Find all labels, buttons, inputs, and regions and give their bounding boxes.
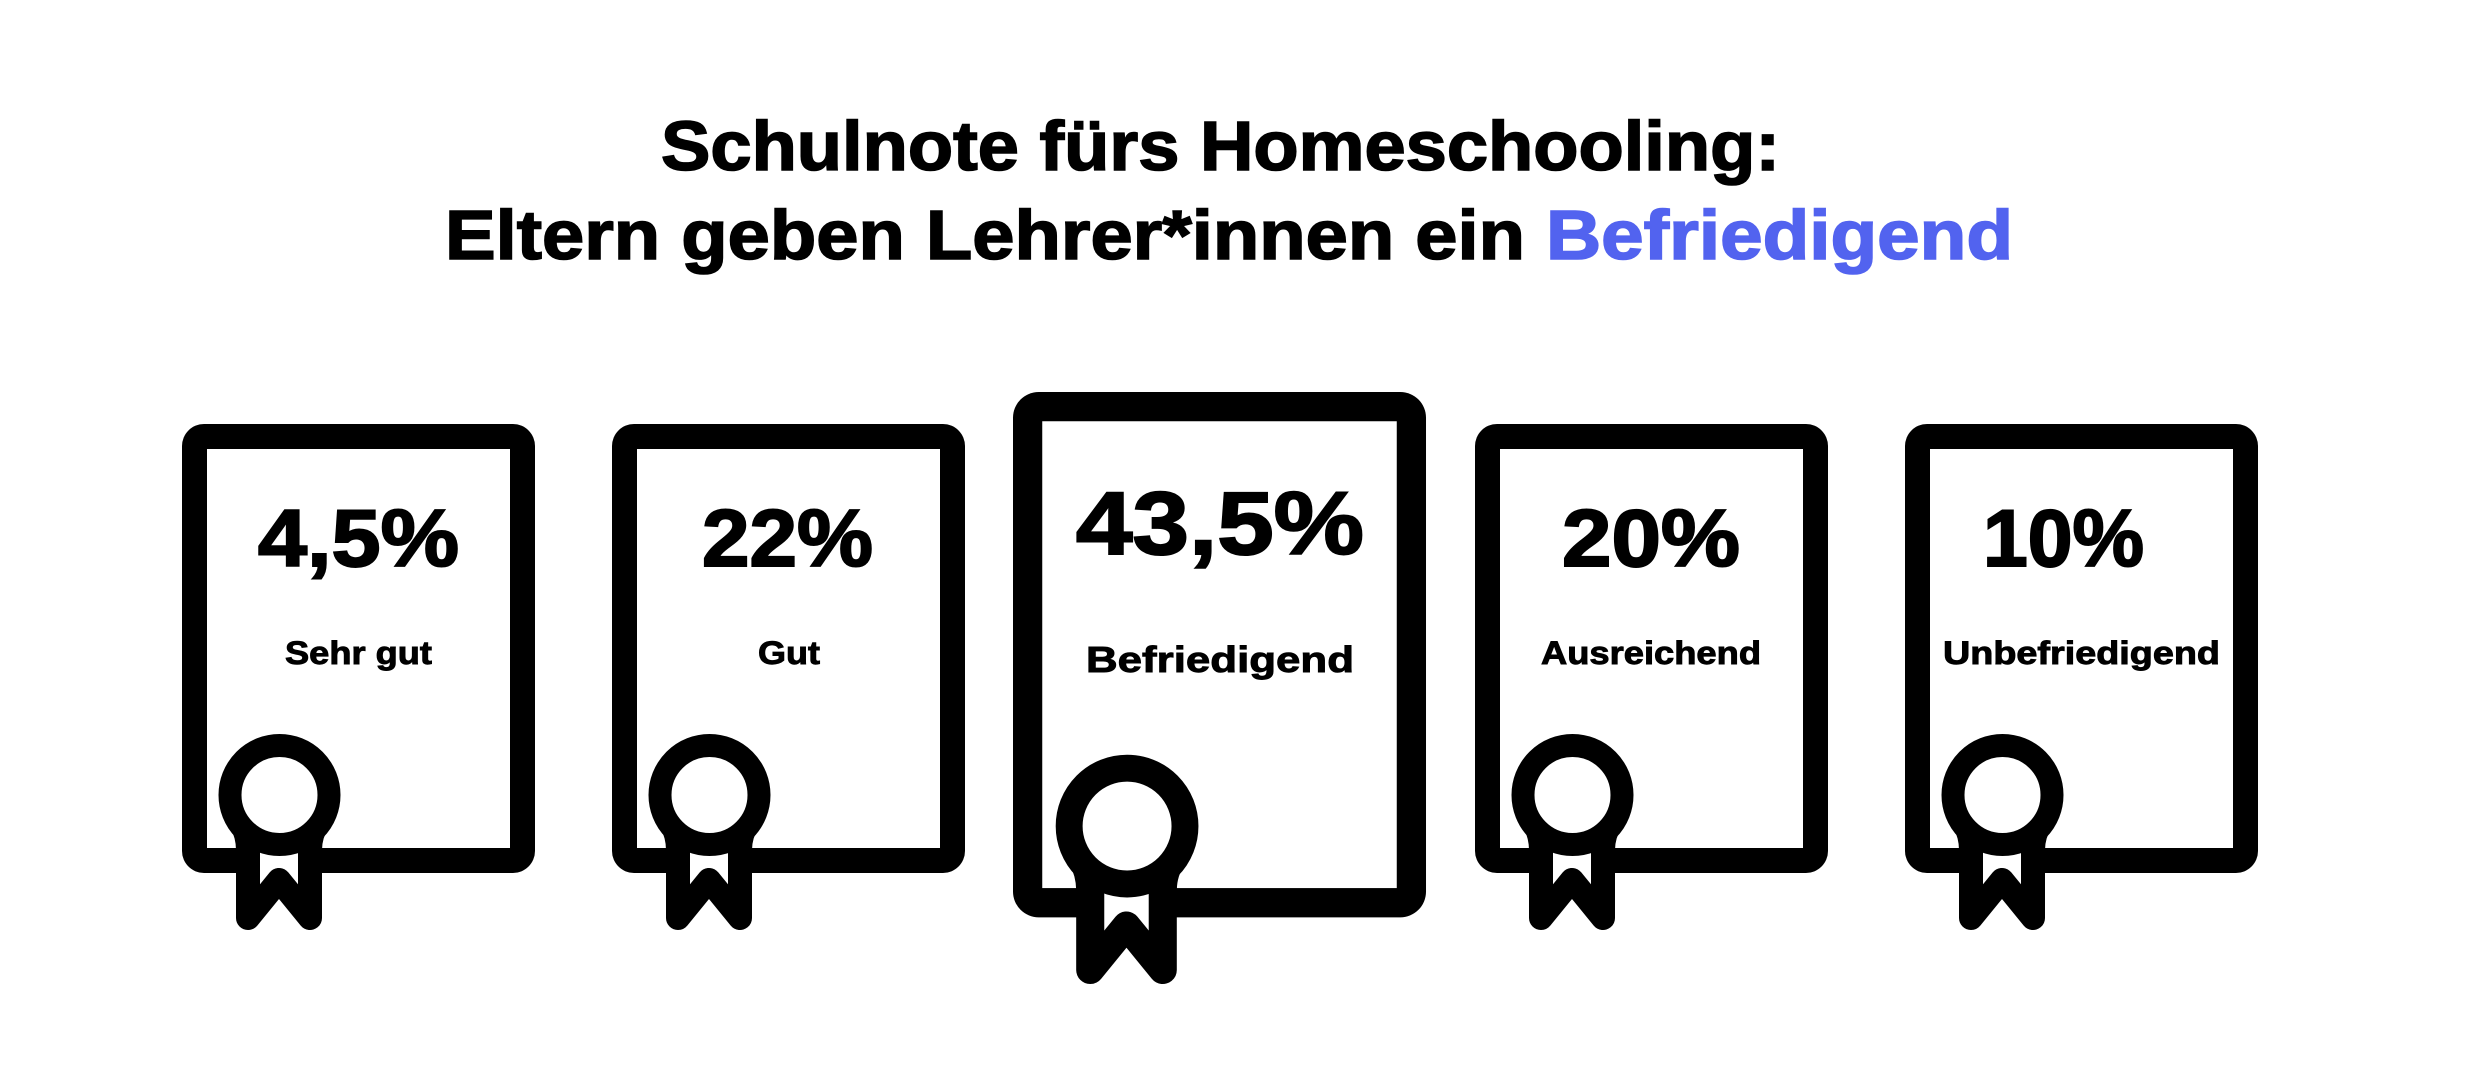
- icon: certificate large: [1013, 392, 1426, 970]
- value: 4,5%: 4,5%: [258, 494, 459, 584]
- icon: certificate: [1905, 424, 2258, 918]
- title: [445, 107, 2013, 274]
- value: 43,5%: 43,5%: [1076, 473, 1364, 573]
- icon: certificate: [182, 424, 535, 918]
- value: 22%: 22%: [702, 494, 873, 584]
- label: Ausreichend: Ausreichend: [1541, 635, 1761, 671]
- label: Befriedigend: Befriedigend: [1086, 639, 1354, 680]
- label: Sehr gut: Sehr gut: [285, 635, 432, 671]
- title: Schulnote fürs Homeschooling:: [661, 107, 1780, 185]
- panel: Ausreichend: [1475, 424, 1828, 918]
- label: Gut: Gut: [758, 635, 820, 671]
- label: Unbefriedigend: Unbefriedigend: [1943, 635, 2220, 671]
- title: Eltern geben Lehrer*innen ein: [445, 196, 1525, 274]
- value: 20%: 20%: [1562, 494, 1740, 584]
- panel: Gut: [612, 424, 965, 918]
- icon: certificate: [1475, 424, 1828, 918]
- value: 10%: 10%: [1983, 494, 2144, 584]
- icon: certificate: [612, 424, 965, 918]
- title: Befriedigend: [1546, 196, 2013, 274]
- panel: Unbefriedigend: [1905, 424, 2258, 918]
- panel: Sehr gut: [182, 424, 535, 918]
- panel: Befriedigend: [1013, 392, 1426, 970]
